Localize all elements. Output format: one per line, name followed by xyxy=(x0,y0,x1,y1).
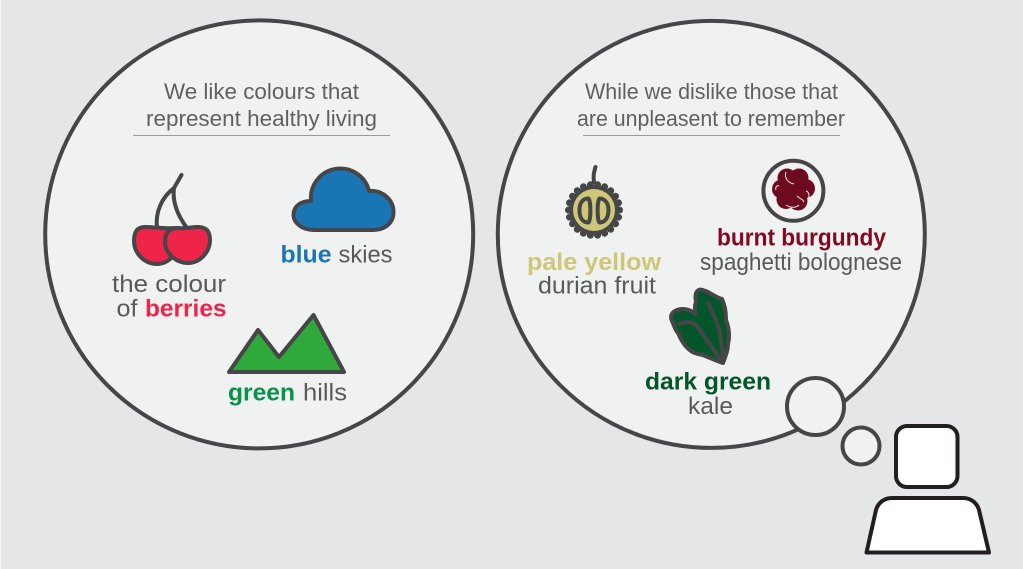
label: burnt burgundy spaghetti bolognese: burnt burgundy xyxy=(717,224,887,252)
label: pale yellow durian fruit: durian fruit xyxy=(538,272,656,300)
heading: disliked colours xyxy=(577,79,845,136)
label: the colour of berries: the colour xyxy=(112,271,226,298)
label: pale yellow durian fruit xyxy=(527,249,661,300)
label: burnt burgundy spaghetti bolognese: spaghetti bolognese xyxy=(700,249,902,276)
label: the colour of berries: of xyxy=(116,296,138,322)
label: green hills: hills xyxy=(303,380,347,406)
label: green hills xyxy=(228,380,347,406)
icon: cherries xyxy=(134,175,210,264)
icon: cloud xyxy=(294,169,394,230)
heading: disliked colours: While we dislike those that xyxy=(585,79,838,104)
label: dark green kale: kale xyxy=(688,393,733,420)
label: burnt burgundy spaghetti bolognese xyxy=(700,224,902,276)
icon: spaghetti plate xyxy=(763,161,823,221)
thought bubble: small xyxy=(842,428,880,464)
icon: durian xyxy=(565,167,623,239)
panel: disliked colours xyxy=(498,21,925,448)
label: the colour of berries xyxy=(112,271,226,322)
heading: liked colours xyxy=(133,79,390,136)
label: blue skies: blue xyxy=(280,242,332,268)
icon: person xyxy=(866,426,989,552)
heading: disliked colours: are unpleasent to remember xyxy=(577,106,845,131)
icon: green hills xyxy=(229,315,344,372)
label: dark green kale: dark green xyxy=(645,368,771,396)
icon: kale leaf xyxy=(671,290,729,363)
thought bubble: large xyxy=(787,378,844,435)
label: blue skies: skies xyxy=(338,242,392,268)
label: dark green kale xyxy=(645,368,771,420)
label: the colour of berries: berries xyxy=(145,296,226,322)
label: pale yellow durian fruit: pale yellow xyxy=(527,249,661,276)
heading: liked colours: We like colours that xyxy=(164,79,359,104)
label: green hills: green xyxy=(228,380,295,406)
label: blue skies xyxy=(280,242,392,268)
panel: liked colours xyxy=(45,20,473,448)
heading: liked colours: represent healthy living xyxy=(146,106,377,131)
